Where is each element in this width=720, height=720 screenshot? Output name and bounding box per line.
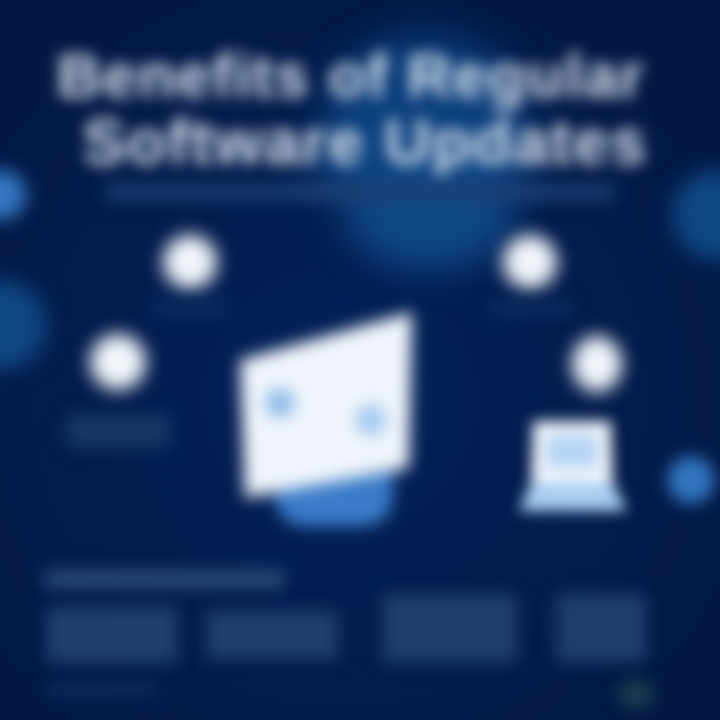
- benefit: right icon: [572, 336, 622, 392]
- footnote: [46, 683, 156, 695]
- left paragraph: Fixes and patches: [46, 608, 127, 619]
- subtitle: Keeping your software up to date brings security and performance: [105, 186, 397, 197]
- left paragraph: [46, 607, 178, 663]
- column heading: [44, 570, 284, 588]
- right paragraph: [206, 611, 338, 659]
- decorative circle: left middle: [0, 280, 47, 370]
- benefit: top right caption: Performance: [488, 302, 545, 313]
- benefit: top right caption: [488, 301, 572, 315]
- title: Software Updates: [83, 106, 647, 178]
- subtitle: [105, 184, 615, 200]
- benefit: top right icon: [503, 235, 557, 289]
- background cloud shape: [302, 19, 545, 286]
- column heading: Why regular updates matter: [44, 571, 167, 582]
- decorative circle: right bottom: [667, 456, 715, 504]
- benefit: top left caption: Security: [150, 302, 186, 313]
- laptop icon: [512, 410, 634, 522]
- corner badge: [618, 680, 654, 708]
- bottom text column 3: [556, 594, 646, 662]
- benefit: top left caption: [150, 301, 230, 315]
- decorative circle: left top: [0, 170, 26, 220]
- benefit: left icon: [90, 334, 146, 390]
- bottom text column 2: [382, 594, 517, 662]
- central monitor: [227, 302, 425, 538]
- benefit: left caption: Compatibility: [66, 415, 123, 426]
- bottom text column 2: Better stability and speed: [382, 595, 494, 606]
- benefit: left caption: [66, 414, 170, 448]
- benefit: top left icon: [163, 235, 217, 289]
- title: [49, 42, 654, 184]
- right paragraph: New features added: [206, 612, 296, 623]
- monitor screen: [227, 302, 425, 509]
- footnote: Stay protected: [46, 684, 110, 695]
- decorative circle: right top: [672, 170, 720, 260]
- bottom text column 1: [38, 563, 344, 698]
- title: Benefits of Regular: [57, 42, 645, 110]
- bottom text column 3: Lower risk: [556, 595, 602, 606]
- monitor stand: [275, 460, 393, 526]
